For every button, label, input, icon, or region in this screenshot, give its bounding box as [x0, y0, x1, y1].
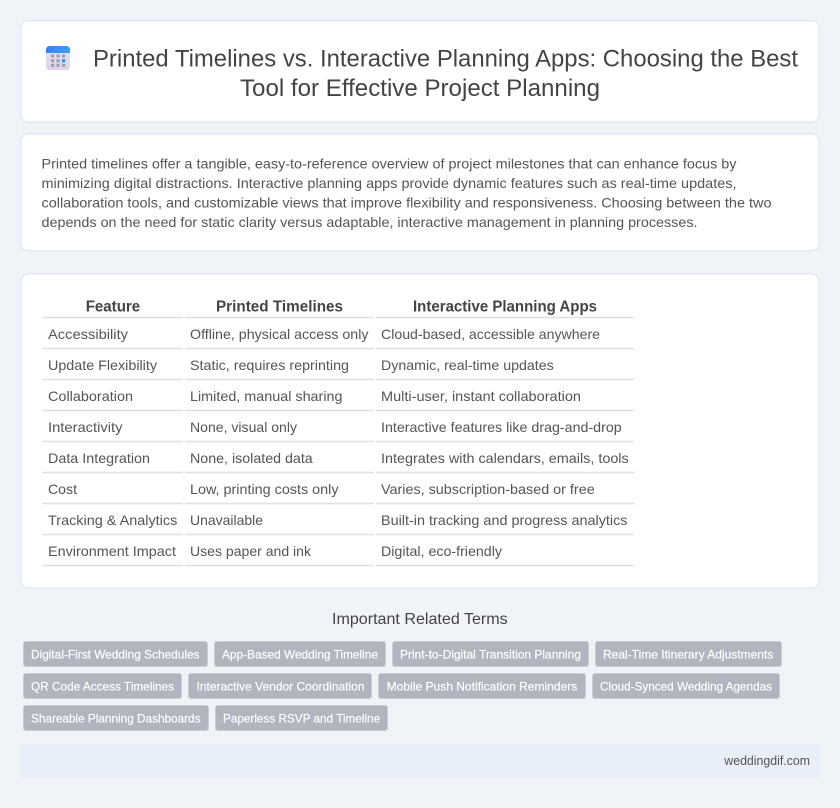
row: cost: Varies, subscription-based or free	[381, 481, 595, 497]
tag: Paperless RSVP and Timeline	[223, 711, 380, 725]
tag: Shareable Planning Dashboards	[31, 711, 200, 725]
row: accessibility: Offline, physical access only	[190, 326, 368, 342]
row: tracking and analytics: Unavailable	[190, 512, 263, 528]
tag: Interactive Vendor Coordination	[196, 679, 364, 693]
row: interactivity: Interactivity	[48, 419, 123, 435]
tag	[214, 642, 386, 666]
tag: Print-to-Digital Transition Planning	[400, 647, 581, 661]
row: data integration	[48, 450, 629, 466]
row: environment impact: Digital, eco-friendly	[381, 543, 502, 559]
footer: weddingdif.com	[723, 753, 810, 768]
text block: introduction	[42, 155, 772, 230]
row: collaboration: Collaboration	[48, 388, 133, 404]
text block: introduction: depends on the need for static clarity versus adaptable, interactive management in planning processes.	[42, 214, 697, 230]
row: tracking and analytics: Built-in tracking and progress analytics	[381, 512, 628, 528]
text block: introduction: Printed timelines offer a tangible, easy-to-reference overview of project milestones that can enhance focus by	[42, 155, 736, 171]
text block: introduction: minimizing digital distractions. Interactive planning apps provide dynamic features such as real-time updates,	[42, 175, 736, 191]
row: cost	[48, 481, 595, 497]
tag: Digital-First Wedding Schedules	[31, 647, 200, 661]
row: collaboration: Multi-user, instant collaboration	[381, 388, 581, 404]
row: accessibility: Accessibility	[48, 326, 128, 342]
tag	[188, 674, 372, 698]
heading: important related terms: Important Related Terms	[332, 611, 508, 628]
row: collaboration	[48, 388, 581, 404]
table header	[86, 299, 597, 316]
icon: calendar	[46, 46, 70, 70]
row: cost: Cost	[48, 481, 77, 497]
row: tracking and analytics: Tracking & Analytics	[48, 512, 177, 528]
tag	[24, 642, 208, 666]
tag list: related terms	[24, 642, 782, 730]
tag: App-Based Wedding Timeline	[222, 647, 378, 661]
row: collaboration: Limited, manual sharing	[190, 388, 342, 404]
row: update flexibility: Update Flexibility	[48, 357, 157, 373]
row: cost: Low, printing costs only	[190, 481, 338, 497]
tag	[596, 642, 782, 666]
tag: Mobile Push Notification Reminders	[387, 679, 577, 693]
title: Printed Timelines vs. Interactive Planning Apps: Choosing the Best	[93, 46, 798, 72]
title: Tool for Effective Project Planning	[240, 75, 600, 102]
tag: QR Code Access Timelines	[31, 679, 174, 693]
row: interactivity	[48, 419, 622, 435]
row: interactivity: Interactive features like drag-and-drop	[381, 419, 622, 435]
row: environment impact: Environment Impact	[48, 543, 176, 559]
table header: Interactive Planning Apps	[413, 299, 597, 316]
title	[93, 46, 798, 102]
row: data integration: Data Integration	[48, 450, 150, 466]
row: environment impact: Uses paper and ink	[190, 543, 312, 559]
tag: Real-Time Itinerary Adjustments	[603, 647, 773, 661]
row: update flexibility: Dynamic, real-time updates	[381, 357, 554, 373]
panel: introduction	[21, 134, 819, 251]
row: update flexibility	[48, 357, 554, 373]
row: data integration: Integrates with calendars, emails, tools	[381, 450, 629, 466]
tag	[24, 674, 182, 698]
tag	[378, 674, 586, 698]
row: data integration: None, isolated data	[190, 450, 313, 466]
table header: Feature	[86, 299, 140, 316]
tag	[592, 674, 780, 698]
row: interactivity: None, visual only	[190, 419, 297, 435]
panel: comparison table	[21, 274, 819, 588]
row: update flexibility: Static, requires reprinting	[190, 357, 349, 373]
tag	[216, 706, 388, 730]
row: accessibility: Cloud-based, accessible anywhere	[381, 326, 600, 342]
text block: introduction: collaboration tools, and customizable views that improve flexibility and responsiveness. Choosing between the two	[42, 194, 772, 210]
row: environment impact	[48, 543, 502, 559]
tag: Cloud-Synced Wedding Agendas	[600, 679, 772, 693]
footer	[20, 744, 820, 778]
panel: header	[21, 21, 819, 122]
tag	[392, 642, 588, 666]
row: tracking and analytics	[48, 512, 628, 528]
row: accessibility	[48, 326, 600, 342]
table header: Printed Timelines	[216, 299, 343, 316]
tag	[24, 706, 208, 730]
